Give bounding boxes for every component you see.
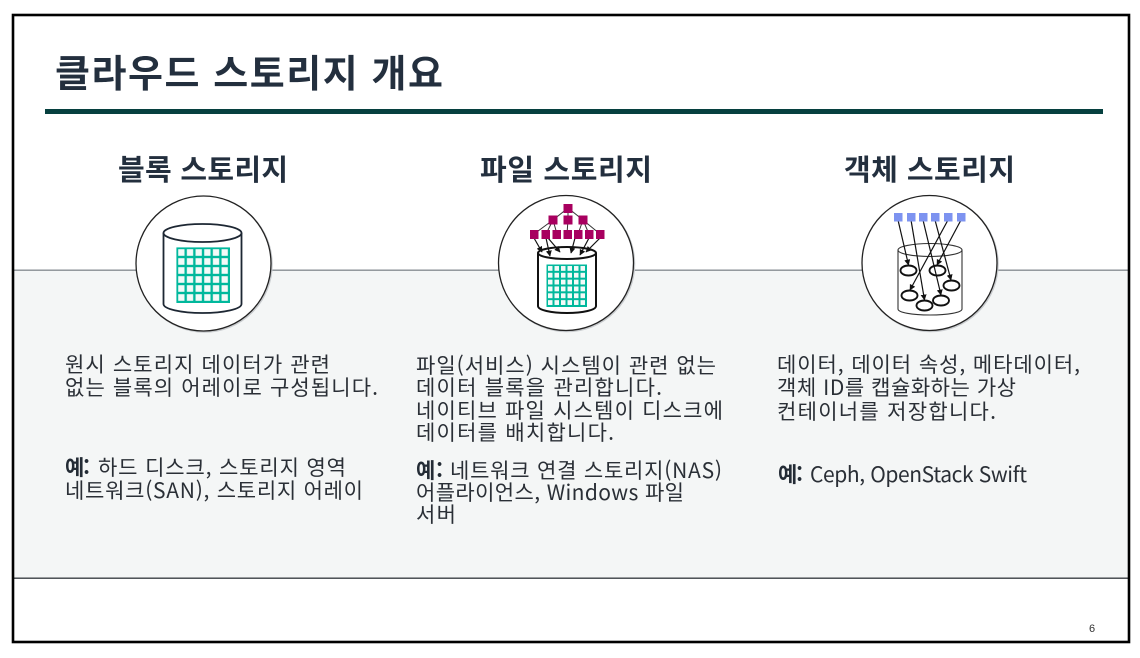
icon: block storage cylinder — [136, 196, 272, 332]
text: file storage examples — [416, 455, 722, 529]
text: object storage examples: 예: — [778, 459, 803, 489]
text: file storage examples: 어플라이언스, Windows 파일 — [416, 477, 684, 507]
panel: grey content band — [13, 270, 1128, 579]
text: block storage description: 원시 스토리지 데이터가 관련 — [65, 349, 330, 379]
column: block storage — [65, 147, 378, 505]
text: block storage description — [65, 349, 378, 402]
text: file storage description: 데이터를 배치합니다. — [416, 417, 614, 447]
heading: object storage: 객체 스토리지 — [844, 147, 1015, 189]
text: object storage examples: Ceph, OpenStack Swift — [810, 459, 1027, 489]
text: block storage description: 없는 블록의 어레이로 구성됩니다. — [65, 372, 378, 402]
text: object storage description: 컨테이너를 저장합니다. — [777, 396, 996, 426]
column: object storage — [777, 147, 1080, 489]
text: object storage description: 데이터, 데이터 속성, 메타데이터, — [777, 349, 1080, 379]
title rule — [45, 109, 1103, 114]
text: file storage examples: 네트워크 연결 스토리지(NAS) — [450, 455, 722, 485]
text: block storage examples — [65, 452, 363, 505]
text: block storage examples: 예: — [65, 452, 90, 482]
text: file storage examples: 서버 — [416, 499, 456, 529]
heading: block storage: 블록 스토리지 — [118, 147, 288, 189]
title: 클라우드 스토리지 개요 — [55, 43, 443, 98]
text: file storage description: 데이터 블록을 관리합니다. — [416, 372, 662, 402]
icon: object storage cylinder — [862, 196, 998, 332]
heading: file storage: 파일 스토리지 — [480, 147, 652, 189]
icon: file storage hierarchy and cylinder — [498, 196, 634, 332]
column: file storage — [416, 147, 723, 529]
text: block storage examples: 네트워크(SAN), 스토리지 어레이 — [65, 475, 363, 505]
text: object storage description — [777, 349, 1080, 426]
text: object storage description: 객체 ID를 캡슐화하는 가상 — [777, 372, 1016, 402]
page number: 6 — [1089, 623, 1095, 635]
text: file storage description: 네이티브 파일 시스템이 디스크에 — [416, 395, 723, 425]
text: block storage examples: 하드 디스크, 스토리지 영역 — [98, 452, 346, 482]
text: file storage examples: 예: — [416, 455, 443, 485]
text: file storage description: 파일(서비스) 시스템이 관련 없는 — [416, 350, 716, 380]
text: file storage description — [416, 350, 723, 447]
